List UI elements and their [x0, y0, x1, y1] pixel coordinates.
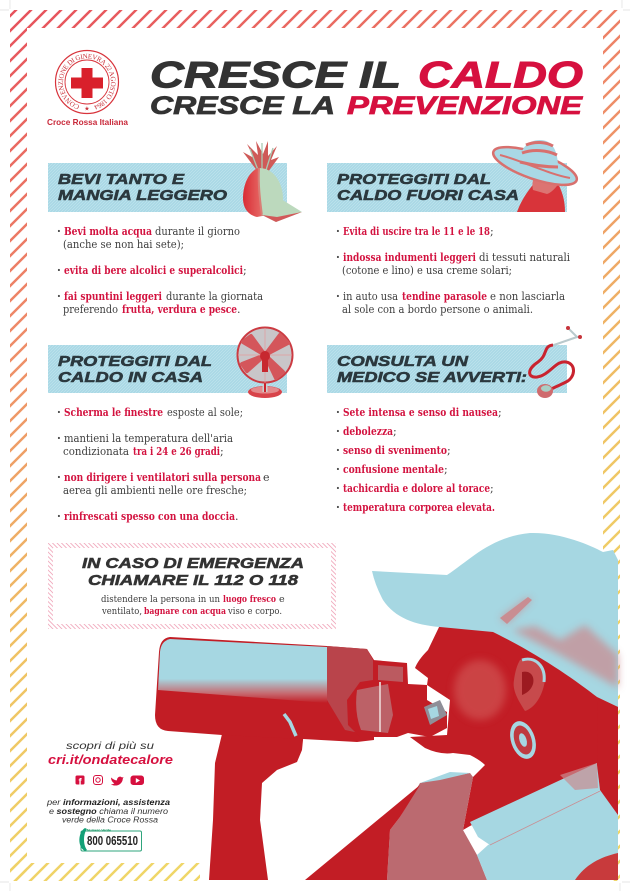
panel: proteggiti dal caldo in casa — [48, 328, 292, 523]
text block: preferendo — [63, 303, 118, 316]
text block: · — [336, 501, 340, 514]
text block: tachicardia e dolore al torace — [343, 482, 490, 495]
badge: numero verde — [79, 828, 142, 851]
text block: durante la giornata — [166, 290, 263, 303]
callout: emergenza: IN CASO DI EMERGENZA — [82, 556, 304, 572]
badge: numero verde: 800 065510 — [87, 833, 138, 848]
text block: Evita di uscire tra le 11 e le 18 — [343, 225, 490, 238]
text block: · — [336, 463, 340, 476]
footer: numero verde text: e sostegno chiama il numero — [49, 807, 169, 816]
text block: · — [57, 406, 61, 419]
shirt shadow triangle — [305, 785, 420, 880]
callout: emergenza: luogo fresco — [223, 594, 276, 605]
heading band: MANGIA LEGGERO — [58, 188, 227, 204]
heading band: CONSULTA UN — [337, 354, 469, 370]
heading band — [48, 345, 287, 393]
sleeve red corner — [575, 853, 618, 880]
logo: Croce Rossa Italiana — [47, 50, 128, 127]
icon: instagram — [94, 776, 102, 784]
footer: numero verde text — [46, 798, 171, 824]
text block: al sole con a bordo persone o animali. — [342, 303, 533, 316]
callout: emergenza: viso e corpo. — [227, 606, 282, 617]
callout: emergenza: CHIAMARE IL 112 O 118 — [88, 573, 299, 589]
badge: numero verde: Numero Verde — [87, 828, 111, 832]
text block: (anche se non hai sete); — [63, 238, 184, 251]
text block: rinfrescati spesso con una doccia — [64, 510, 235, 523]
logo: Croce Rossa Italiana: Croce Rossa Italiana — [47, 117, 128, 127]
heading band: PROTEGGITI DAL — [58, 354, 212, 370]
callout: emergenza: e — [279, 594, 285, 605]
title: PREVENZIONE — [347, 92, 583, 120]
text block: debolezza — [343, 425, 393, 438]
text block: ; — [447, 444, 451, 457]
illustration: woman drinking from a bottle — [155, 533, 618, 880]
icon: youtube — [130, 776, 144, 785]
callout: emergenza: distendere la persona in un — [101, 594, 220, 605]
text block: condizionata — [63, 445, 129, 458]
callout: emergenza: bagnare con acqua — [144, 606, 226, 617]
text block: · — [336, 406, 340, 419]
text block: durante il giorno — [155, 225, 240, 238]
text block: non dirigere i ventilatori sulla persona — [64, 471, 261, 484]
heading band: CALDO IN CASA — [58, 370, 203, 386]
footer: numero verde text: per informazioni, assistenza — [46, 798, 171, 807]
heading band: MEDICO SE AVVERTI: — [337, 370, 527, 386]
hand and arm — [209, 730, 304, 880]
text block: · — [57, 290, 61, 303]
cap — [372, 533, 618, 707]
text block: confusione mentale — [343, 463, 444, 476]
text block: · — [57, 225, 61, 238]
text block: · — [336, 225, 340, 238]
text block: · — [57, 471, 61, 484]
text block: ; — [220, 445, 224, 458]
shirt right and collar, blue — [470, 763, 600, 845]
title: CALDO — [418, 54, 583, 96]
title — [150, 54, 583, 120]
heading band: PROTEGGITI DAL — [337, 172, 491, 188]
text block: · — [57, 510, 61, 523]
text block: ; — [444, 463, 448, 476]
text block: . — [237, 303, 240, 316]
bottle blue section — [158, 639, 327, 703]
heading band — [327, 139, 581, 212]
shirt left, pink — [387, 773, 487, 880]
title: CRESCE LA — [150, 92, 335, 120]
title: CRESCE IL — [150, 54, 401, 96]
ear — [514, 659, 545, 711]
heading band: BEVI TANTO E — [58, 172, 184, 188]
text block: · — [336, 290, 340, 303]
text block: ; — [498, 406, 502, 419]
text block: · — [57, 264, 61, 277]
icon: sun hat — [489, 139, 581, 212]
footer: scopri di più: scopri di più su — [66, 740, 154, 752]
text block — [57, 225, 263, 316]
text block: e non lasciarla — [490, 290, 565, 303]
text block: (cotone e lino) e usa creme solari; — [342, 264, 512, 277]
text block: esposte al sole; — [167, 406, 243, 419]
text block: ; — [490, 225, 494, 238]
icon: pineapple — [243, 141, 302, 222]
footer: scopri di più: cri.it/ondatecalore — [48, 753, 173, 767]
text block: . — [235, 510, 238, 523]
text block: temperatura corporea elevata. — [343, 501, 495, 514]
callout: emergenza — [50, 546, 334, 626]
text block: tra i 24 e 26 gradi — [133, 445, 220, 458]
bottle body — [155, 637, 374, 742]
text block: senso di svenimento — [343, 444, 447, 457]
text block: Sete intensa e senso di nausea — [343, 406, 498, 419]
text block — [57, 406, 270, 523]
earring — [506, 718, 540, 762]
footer: numero verde text: verde della Croce Rossa — [62, 816, 159, 824]
text block: ; — [490, 482, 494, 495]
face, neck and hair — [410, 625, 618, 830]
panel: consulta un medico — [327, 326, 582, 514]
text block — [336, 406, 502, 514]
bottle cap and handle — [347, 660, 447, 737]
text block: tendine parasole — [402, 290, 487, 303]
logo: Croce Rossa Italiana: CONVENZIONE DI GINEVRA 22 AGOSTO 1864 — [58, 54, 116, 110]
text block: aerea gli ambienti nelle ore fresche; — [63, 484, 247, 497]
finger highlight — [284, 714, 296, 736]
text block: evita di bere alcolici e superalcolici — [64, 264, 243, 277]
heading band — [48, 163, 287, 212]
text block: frutta, verdura e pesce — [122, 303, 237, 316]
icon: fan — [238, 328, 292, 398]
icon: facebook: f — [78, 776, 82, 788]
text block: e — [263, 471, 270, 484]
red cross — [71, 68, 103, 98]
text block: ; — [393, 425, 397, 438]
callout: emergenza: ventilato, — [101, 606, 142, 617]
logo: Croce Rossa Italiana: ★ — [84, 106, 90, 112]
panel: proteggiti dal caldo fuori casa — [327, 139, 581, 316]
text block: · — [57, 432, 61, 445]
text block: ; — [243, 264, 247, 277]
text block: · — [336, 482, 340, 495]
text block: Bevi molta acqua — [64, 225, 152, 238]
heading band — [327, 345, 567, 393]
text block — [336, 225, 570, 316]
text block: in auto usa — [343, 290, 398, 303]
hair tail — [597, 700, 618, 815]
footer: scopri di più — [48, 740, 173, 767]
panel: bevi tanto e mangia leggero — [48, 141, 302, 316]
text block: · — [336, 425, 340, 438]
text block: · — [336, 251, 340, 264]
icon: stethoscope — [530, 326, 582, 398]
text block: indossa indumenti leggeri — [343, 251, 476, 264]
heading band: CALDO FUORI CASA — [337, 188, 519, 204]
text block: mantieni la temperatura dell'aria — [64, 432, 233, 445]
icons: social media — [76, 776, 144, 788]
icon: twitter — [111, 777, 124, 786]
text block: fai spuntini leggeri — [64, 290, 162, 303]
text block: Scherma le finestre — [64, 406, 163, 419]
text block: · — [336, 444, 340, 457]
text block: di tessuti naturali — [479, 251, 570, 264]
